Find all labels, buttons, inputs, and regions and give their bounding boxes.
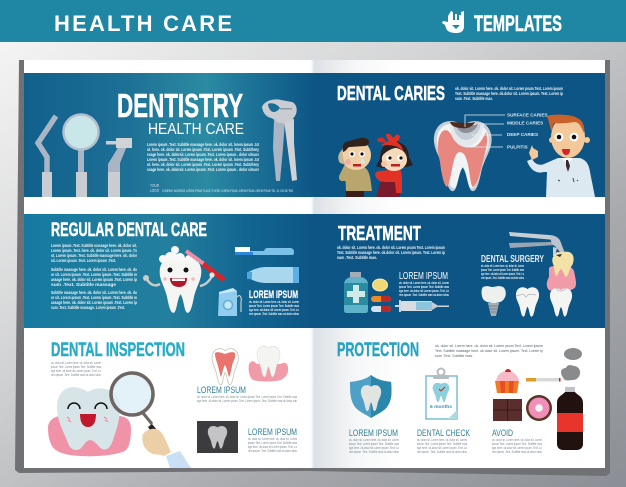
logo placeholder: LOGO: [150, 188, 159, 193]
tooth callout labels: MIDDLE CARIES: [507, 120, 543, 126]
dental surgery text: ipsum Text. Lorem ipsum Text. Subtitle mas: [481, 268, 524, 272]
icon: six month check clipboard: 6 months: [430, 404, 452, 410]
panel: regular dental care: [24, 214, 315, 328]
protection text: [435, 343, 544, 358]
regular care text: or sit. Lorem ipsum .Text. Lorem ipsum .Text. Subtitle m: [51, 272, 137, 277]
diagram: tooth cross section: [434, 121, 492, 191]
regular care text: Lorem ipsum .Text. Subtitle massage here. ok. dolor sit.: [51, 243, 137, 248]
panel: treatment: [315, 214, 605, 328]
protection column text: [349, 438, 399, 454]
icon: extraction forceps: [509, 232, 566, 257]
dental surgery heading: DENTAL SURGERY: [481, 254, 544, 265]
lorem ipsum text: [249, 300, 299, 316]
protection text: sum .Text. Subtitle mas.: [435, 353, 473, 358]
header templates label: TEMPLATES: [474, 11, 562, 36]
lorem ipsum text: ipsum Text. Lorem ipsum Text. Subtitle mas: [249, 304, 299, 308]
caries body text: [455, 86, 563, 101]
protection column text: ipsum Text. Lorem ipsum Text. Subtitle mas: [349, 442, 399, 446]
icon: dental implant: [482, 286, 506, 316]
cover body text: ssage here. ok. dolorsit. Lorem ipsum .Text. Lorem ipsum . dolor sitnusr: [147, 167, 259, 172]
regular care text: sum .Text. Subtitle massage: [51, 282, 117, 287]
caries body text: sum .Text. Subtitle mas.: [455, 96, 493, 101]
inspection text one: [197, 395, 297, 403]
inspection text one: ok. dolor sit. Lorem here. ok. dolor sit. Lorem ipsum Text. Lorem ipsum Text. Subtitle mas: [197, 395, 297, 399]
icon: medicine bottle: [344, 272, 368, 313]
icon: pills: [371, 279, 391, 312]
treatment text: sum .Text. Subtitle mas.: [337, 255, 377, 260]
treatment text: ok. dolor sit. Lorem here. ok. dolor sit. Lorem psum Text. Lorem ipsum: [337, 245, 445, 250]
panel: dental inspection: [48, 340, 297, 468]
dental check text: ok. dolor sit. Lorem here. ok. dolor sit. Lorem: [417, 438, 467, 442]
inspection text: rem ipsum .Text. Subtitle mas ok.dolor sitnu: [51, 373, 101, 377]
character: dentist: [527, 115, 595, 197]
avoid text: ipsum Text. Lorem ipsum Text. Subtitle mas: [492, 442, 542, 446]
panel: dentistry cover: [24, 73, 315, 197]
regular care text: assage here. ok. dolor sit. Lorem ipsum .Text. Lorem ip: [51, 300, 137, 305]
avoid text: [492, 438, 542, 454]
brochure sheet: [24, 60, 605, 468]
inspection text two: sge here. ok.dolor sit Lorem ipsum .Text. Lo: [248, 445, 297, 449]
icon: donut: [526, 395, 552, 421]
logo placeholder: YOUR: [150, 183, 160, 188]
lorem ipsum text: sge here. ok.dolor sit Lorem ipsum .Text. Lo: [249, 308, 299, 312]
regular care text: Subtitle massage here. ok. dolor sit. Lorem here. ok. do: [51, 290, 137, 295]
icon: tooth x-ray: [197, 421, 238, 453]
logo placeholder: [150, 183, 160, 193]
tooth callout labels: SURFACE CARIES: [507, 112, 548, 118]
character: crying boy: [338, 138, 372, 197]
inspection heading two: LOREM IPSUM: [248, 427, 297, 438]
icon: soda bottle: [557, 387, 583, 450]
icon: magnifying glass with hand: [111, 373, 191, 468]
icon: syringe: [395, 300, 449, 312]
icon: filled tooth: [550, 288, 572, 316]
protection text: ok. dolor sit. Lorem here. ok. dolor sit. Lorem psum Text. Lorem ipsum: [435, 343, 544, 348]
treatment lorem text: [399, 281, 449, 297]
avoid heading: AVOID: [492, 428, 513, 439]
treatment lorem text: rem ipsum .Text. Subtitle mas ok.dolor sitnu: [399, 293, 449, 297]
lorem ipsum heading: LOREM IPSUM: [249, 289, 298, 301]
icon: six month check clipboard: [426, 368, 457, 419]
caries body text: Text. Subtitle massage here. ok.dolor sit. Lorem ipsum. Text. Lorem ip: [455, 91, 563, 96]
dental check text: rem ipsum .Text. Subtitle mas ok.dolor sitnu: [417, 450, 467, 454]
inspection text: [51, 361, 101, 377]
tooth callout labels: [465, 112, 548, 150]
icon: cigarette: [526, 378, 560, 382]
protection column text: ok. dolor sit. Lorem here. ok. dolor sit. Lorem: [349, 438, 399, 442]
icon: hand sign: [442, 11, 464, 33]
icon: dental drill: [106, 138, 132, 197]
protection column text: rem ipsum .Text. Subtitle mas ok.dolor sitnu: [349, 450, 399, 454]
icon: shield tooth: [350, 375, 392, 418]
icon: smoke: [561, 348, 582, 380]
regular care text: sum .Text. Subtitle massage. Lorem ipsum .Text.: [51, 305, 125, 310]
inspection text two: rem ipsum .Text. Subtitle mas ok.dolor sitnu: [248, 449, 297, 453]
regular care text: assage here. ok. dolor sit. Lorem ipsum .Text. Lorem ip: [51, 277, 137, 282]
icon: tooth section: [212, 349, 238, 385]
panel: protection: [337, 340, 583, 454]
dental surgery text: rem ipsum .Text. Subtitle mas ok.dolor sitnu: [481, 276, 524, 280]
regular care text: Subtitle massage here. ok. dolor sit. Lorem here. ok. do: [51, 267, 137, 272]
icon: dental probe: [38, 116, 56, 197]
inspection text two: ipsum Text. Lorem ipsum Text. Subtitle mas: [248, 441, 297, 445]
inspection text: ok. dolor sit. Lorem here. ok. dolor sit. Lorem: [51, 361, 101, 365]
panel: dental caries: [315, 73, 605, 197]
icon: dental floss: [218, 288, 241, 316]
inspection title: DENTAL INSPECTION: [51, 340, 185, 361]
treatment title: TREATMENT: [338, 223, 421, 245]
treatment text: Text. Subtitle massage here. ok.dolor sit. Lorem ipsum. Text. Lorem ip: [337, 250, 445, 255]
character: crying girl: [375, 134, 413, 197]
treatment lorem text: ipsum Text. Lorem ipsum Text. Subtitle mas: [399, 285, 449, 289]
cover body text: ssage here. ok. dolorsit. Lorem ipsum .Text. Lorem ipsum . dolor sitnusr: [147, 152, 259, 157]
regular care text: ot. Lorem ipsum .Text. Subtitle massage here. ok. dolor: [51, 253, 137, 258]
avoid text: rem ipsum .Text. Subtitle mas ok.dolor sitnu: [492, 450, 542, 454]
protection text: Text. Subtitle massage here. ok.dolor sit. Lorem ipsum. Text. Lorem ip: [435, 348, 544, 353]
icon: toothpaste tube: [247, 267, 299, 283]
dental check text: [417, 438, 467, 454]
header bar: [0, 0, 626, 42]
lorem ipsum text: ok. dolor sit. Lorem here. ok. dolor sit. Lorem: [249, 300, 299, 304]
character: happy tooth brushing: [143, 246, 224, 313]
dental surgery text: ok. dolor sit. Lorem here. ok. dolor sit. Lorem: [481, 264, 524, 268]
protection heading: LOREM IPSUM: [349, 428, 398, 439]
tooth callout labels: PULPITIS: [507, 144, 528, 150]
treatment text: [337, 245, 445, 260]
dental check heading: DENTAL CHECK: [417, 428, 470, 439]
inspection text: sge here. ok.dolor sit Lorem ipsum .Text. Lo: [51, 369, 101, 373]
regular care text: sit. Lorem ipsum .Text. Lorem ipsum .Text.: [51, 258, 116, 263]
cover body text: ot. here. ok. dolor sit. Lorem ipsum .Text. Lorem ipsum .Text. Subtitleny: [147, 147, 259, 152]
dental check text: ipsum Text. Lorem ipsum Text. Subtitle mas: [417, 442, 467, 446]
character: smiling tooth on gum: [48, 387, 131, 456]
icon: crowned tooth: [516, 287, 539, 317]
protection column text: sge here. ok.dolor sit Lorem ipsum .Text. Lo: [349, 446, 399, 450]
cover subtitle: HEALTH CARE: [148, 121, 244, 138]
tooth callout labels: DEEP CARIES: [507, 132, 538, 137]
treatment lorem text: ok. dolor sit. Lorem here. ok. dolor sit. Lorem: [399, 281, 449, 285]
inspection heading one: LOREM IPSUM: [197, 385, 246, 396]
inspection text: ipsum Text. Lorem ipsum Text. Subtitle mas: [51, 365, 101, 369]
regular care text: [51, 243, 137, 310]
cover title: DENTISTRY: [117, 87, 243, 124]
treatment lorem heading: LOREM IPSUM: [399, 270, 448, 282]
treatment lorem text: sge here. ok.dolor sit Lorem ipsum .Text. Lo: [399, 289, 449, 293]
icon: dental pliers: [262, 99, 297, 181]
dental surgery text: sge here. ok.dolor sit Lorem ipsum .Text. Lo: [481, 272, 524, 276]
regular care title: REGULAR DENTAL CARE: [51, 220, 207, 241]
icon: dental mirror: [64, 114, 98, 197]
icon: chocolate bar: [493, 399, 522, 421]
avoid text: sge here. ok.dolor sit Lorem ipsum .Text. Lo: [492, 446, 542, 450]
icon: decayed tooth in gum: [547, 252, 576, 291]
cover body text: ot. here. ok. dolor sit. Lorem ipsum .Text. Lorem ipsum .Text. Subtitleny: [147, 162, 259, 167]
lorem ipsum text: rem ipsum .Text. Subtitle mas ok.dolor sitnu: [249, 312, 299, 316]
icon: tooth in gum: [249, 346, 288, 382]
inspection text one: sge here. ok.dolor sit. Lorem ipsum .Text. Lorem ipsum .Text. Subtitle mas ok.dolor sitn: [197, 399, 297, 403]
inspection text two: [248, 437, 297, 453]
caries title: DENTAL CARIES: [337, 83, 445, 105]
cover body text: Lorem ipsum .Text. Subtitle massage here. ok. dolor sit. lorem ipsum .txt: [147, 157, 259, 162]
icon: toothbrush: [235, 247, 294, 255]
dental check text: sge here. ok.dolor sit Lorem ipsum .Text. Lo: [417, 446, 467, 450]
inspection text two: ok. dolor sit. Lorem here. ok. dolor sit. Lorem: [248, 437, 297, 441]
regular care text: Lorem ipsum .Text. here. ok. dolor sit. Lorem ipsum .Tx: [51, 248, 137, 253]
cover body text: [147, 142, 259, 172]
cover body text: Lorem ipsum .Text. Subtitle massage here. ok. dolor sit. lorem ipsum .txt: [147, 142, 259, 147]
header title: HEALTH CARE: [54, 11, 232, 36]
icon: cupcake: [495, 369, 519, 393]
dental surgery text: [481, 264, 524, 280]
protection title: PROTECTION: [337, 340, 419, 361]
caries body text: ok. dolor sit. Lorem here. ok. dolor sit. Lorem psum Text. Lorem ipsum: [455, 86, 563, 91]
avoid text: ok. dolor sit. Lorem here. ok. dolor sit. Lorem: [492, 438, 542, 442]
company line: COMPANY ADDRESS LOREM IPSUM PLACE IT HERE LOREM IPSUM LOREM IPSUM LOREM IPSUM TEL. 01 234 567 890: [162, 189, 293, 193]
regular care text: or sit. Lorem ipsum .Text. Lorem ipsum .Text. Subtitle m: [51, 295, 137, 300]
